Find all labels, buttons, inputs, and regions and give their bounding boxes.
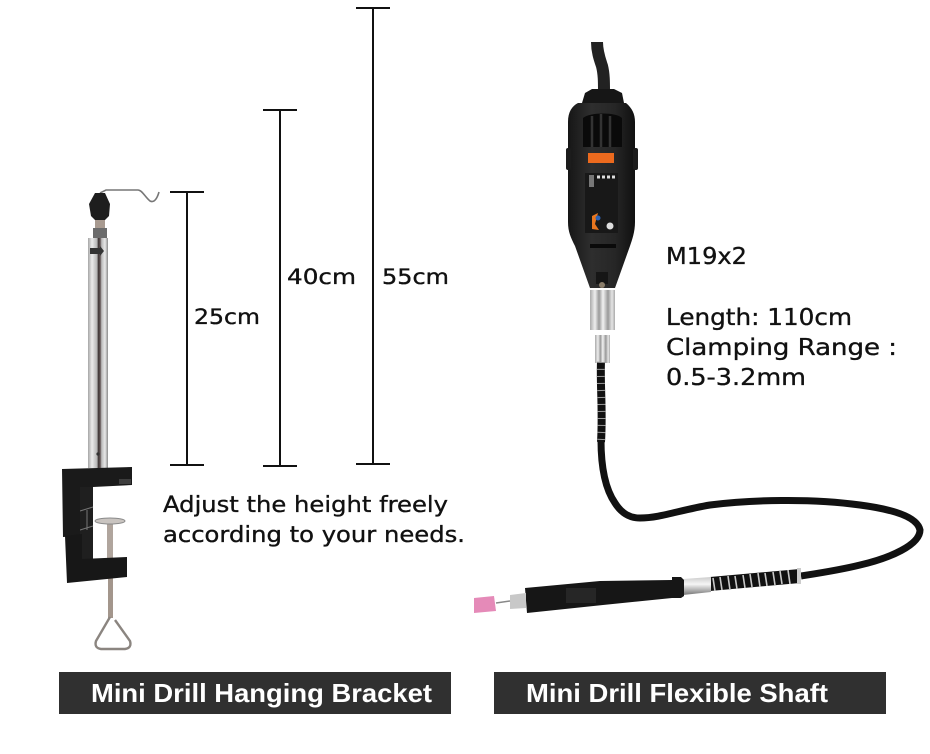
photo: flexible shaft with grinder — [474, 42, 920, 613]
silver nose — [590, 290, 615, 330]
label bar: flexible shaft: Mini Drill Flexible Shaft — [526, 678, 828, 708]
vents — [583, 114, 622, 147]
text: shaft specifications: 0.5-3.2mm — [666, 365, 806, 391]
dimension: 55cm — [356, 8, 449, 464]
grinder body — [568, 103, 635, 288]
power cord — [597, 42, 604, 92]
text: shaft specifications — [666, 244, 897, 391]
spring guard — [597, 362, 606, 442]
triangle handle — [96, 617, 130, 649]
metal spring on cable — [710, 569, 800, 591]
side buttons — [566, 148, 571, 170]
metal coupler — [683, 577, 711, 595]
clamp screw — [107, 523, 113, 560]
text: adjust height note: according to your needs. — [163, 523, 465, 548]
text: shaft specifications: M19x2 — [666, 244, 747, 270]
C clamp — [62, 467, 132, 537]
handpiece — [525, 577, 684, 613]
text: shaft specifications: Length: 110cm — [666, 305, 852, 331]
text: shaft specifications: Clamping Range : — [666, 335, 897, 361]
telescopic tube — [88, 238, 108, 468]
label plate — [585, 173, 618, 233]
grinder collar — [582, 89, 624, 103]
dimension: 55cm: 55cm — [382, 265, 449, 289]
dimension: 40cm: 40cm — [287, 265, 356, 289]
flexible cable — [601, 440, 920, 576]
label bar: hanging bracket — [59, 672, 451, 714]
text: adjust height note: Adjust the height freely — [163, 493, 448, 518]
orange switch — [588, 153, 614, 163]
clamp inner ribs — [80, 486, 93, 560]
pink grinding stone — [474, 596, 496, 613]
dimension: 40cm — [263, 110, 356, 466]
collet — [510, 593, 526, 609]
hook wire — [100, 190, 159, 202]
label bar: flexible shaft — [494, 672, 886, 714]
chuck — [89, 193, 110, 220]
dimension: 25cm: 25cm — [194, 305, 260, 329]
spindle — [95, 220, 105, 229]
photo: hanging bracket — [62, 190, 159, 649]
text: adjust height note — [163, 493, 465, 548]
dimension: 25cm — [170, 192, 260, 465]
label bar: hanging bracket: Mini Drill Hanging Bracket — [91, 678, 432, 708]
